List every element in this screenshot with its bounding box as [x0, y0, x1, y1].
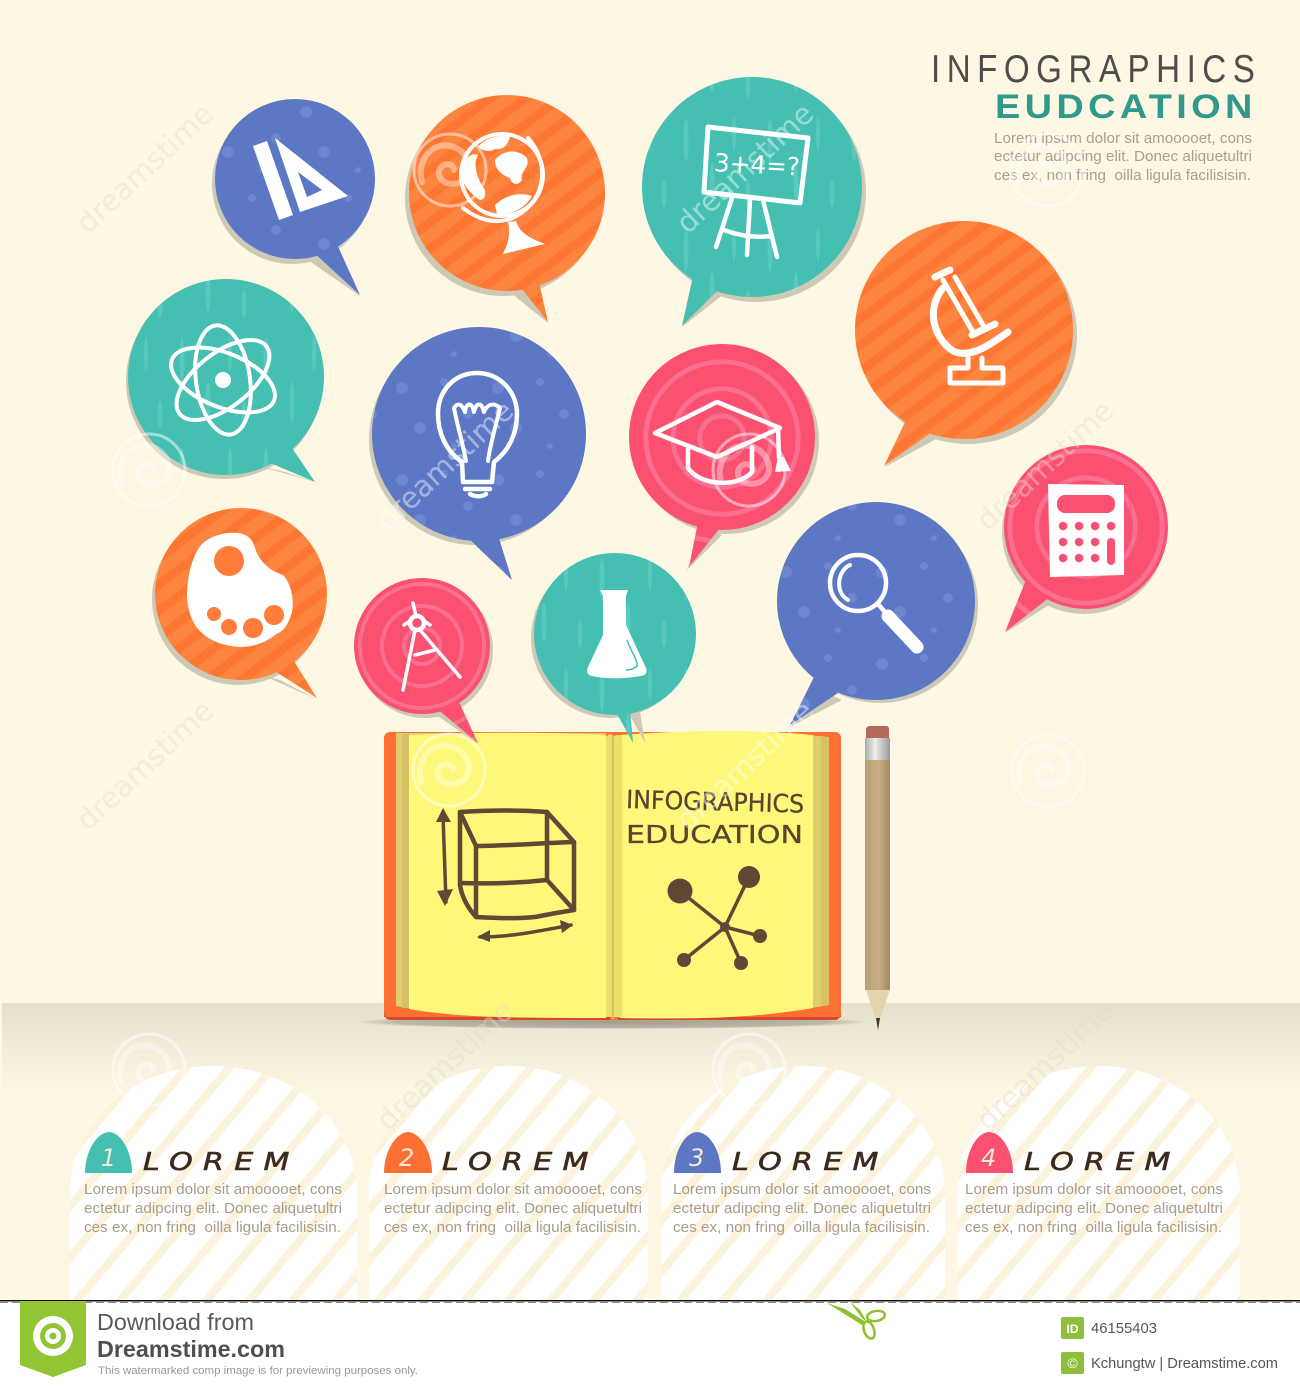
- text 4: [965, 1182, 1223, 1236]
- bubble: light bulb: [369, 327, 586, 580]
- text 2: ces ex, non fring oilla ligula facilisisin.: [384, 1220, 641, 1236]
- footer strip: [0, 1300, 1300, 1390]
- watermarks: [70, 96, 1120, 1137]
- text 2: [384, 1182, 642, 1236]
- title: infographics: INFOGRAPHICS: [931, 46, 1255, 91]
- watermarks: dreamstime: [370, 993, 520, 1137]
- icon: id: ID: [1066, 1322, 1079, 1336]
- intro text: ectetur adipcing elit. Donec aliquetultri: [994, 149, 1252, 165]
- bubble: set square: [212, 99, 375, 296]
- heading 3: LOREM: [732, 1146, 879, 1176]
- pencil: [865, 726, 890, 1030]
- drawing: molecule: [668, 866, 767, 970]
- watermarks: dreamstime: [970, 993, 1120, 1137]
- dreamstime brand: Dreamstime.com: [97, 1336, 285, 1362]
- credit: Kchungtw | Dreamstime.com: [1091, 1355, 1278, 1372]
- icon: scissors: [827, 1302, 886, 1340]
- bubble: blackboard: 3+4=?: [713, 148, 801, 182]
- intro text: ces ex, non fring oilla ligula facilisisin.: [994, 168, 1251, 184]
- drawing: cube with arrows: [436, 808, 574, 942]
- info card 2: [369, 1066, 648, 1300]
- info card 4: [957, 1066, 1240, 1300]
- bubble: magnifier: [777, 502, 978, 727]
- subtitle: eudcation: EUDCATION: [995, 87, 1252, 126]
- watermarks: dreamstime: [670, 693, 820, 837]
- text 3: ectetur adipcing elit. Donec aliquetultri: [673, 1201, 931, 1217]
- bubble: microscope: [855, 221, 1077, 467]
- open book: [384, 731, 841, 1020]
- badge 2: 2: [399, 1144, 414, 1172]
- right page: [619, 731, 829, 1018]
- title block: [931, 46, 1255, 184]
- badge 4: 4: [981, 1144, 996, 1172]
- watermarks: dreamstime: [70, 693, 220, 837]
- text 1: Lorem ipsum dolor sit amooooet, cons: [84, 1182, 342, 1198]
- download text: Download from: [97, 1309, 254, 1335]
- info card 3: [661, 1066, 945, 1300]
- bubble: blackboard: [642, 77, 866, 327]
- icon: dreamstime badge: [20, 1301, 86, 1377]
- info card 1: [70, 1066, 357, 1300]
- book shadow: [356, 1015, 868, 1029]
- book spine: [606, 734, 622, 1017]
- intro text: [994, 131, 1252, 184]
- badge 3: 3: [689, 1144, 704, 1172]
- heading 2: LOREM: [442, 1146, 589, 1176]
- heading 4: LOREM: [1024, 1146, 1171, 1176]
- image id: 46155403: [1091, 1320, 1157, 1337]
- book heading: INFOGRAPHICS: [626, 785, 805, 819]
- bubble: compass: [354, 578, 493, 744]
- bubble: globe: [405, 95, 605, 323]
- text 3: [673, 1182, 931, 1236]
- book heading: [626, 785, 805, 849]
- badge 4: [966, 1132, 1013, 1173]
- watermarks: dreamstime: [370, 393, 520, 537]
- text 1: ces ex, non fring oilla ligula facilisisin.: [84, 1220, 341, 1236]
- bubble: flask: [531, 553, 696, 743]
- ground band: [2, 1003, 1300, 1098]
- text 4: ces ex, non fring oilla ligula facilisisin.: [965, 1220, 1222, 1236]
- badge 3: [674, 1132, 721, 1173]
- book heading: EDUCATION: [626, 820, 803, 849]
- icon: id: [1061, 1317, 1084, 1339]
- text 1: ectetur adipcing elit. Donec aliquetultri: [84, 1201, 342, 1217]
- watermarks: dreamstime: [970, 393, 1120, 537]
- badge 1: 1: [101, 1144, 116, 1172]
- bubble: graduation cap: [629, 344, 819, 570]
- badge 2: [384, 1132, 432, 1173]
- bubble: atom: [126, 279, 324, 482]
- badge 1: [85, 1132, 132, 1173]
- text 2: ectetur adipcing elit. Donec aliquetultri: [384, 1201, 642, 1217]
- text 1: [84, 1182, 342, 1236]
- bubble: palette: [152, 508, 327, 699]
- bubble: calculator: [1002, 445, 1168, 633]
- heading 1: LOREM: [143, 1146, 290, 1176]
- text 2: Lorem ipsum dolor sit amooooet, cons: [384, 1182, 642, 1198]
- text 4: ectetur adipcing elit. Donec aliquetultri: [965, 1201, 1223, 1217]
- text 3: ces ex, non fring oilla ligula facilisisin.: [673, 1220, 930, 1236]
- left page: [396, 733, 606, 1018]
- intro text: Lorem ipsum dolor sit amooooet, cons: [994, 131, 1252, 147]
- icon: copyright: [1061, 1352, 1084, 1374]
- book cover: [384, 732, 841, 1020]
- icon: copyright: ©: [1067, 1355, 1078, 1371]
- footer note: This watermarked comp image is for previewing purposes only.: [98, 1365, 418, 1377]
- text 4: Lorem ipsum dolor sit amooooet, cons: [965, 1182, 1223, 1198]
- watermarks: dreamstime: [70, 96, 220, 240]
- text 3: Lorem ipsum dolor sit amooooet, cons: [673, 1182, 931, 1198]
- watermarks: dreamstime: [670, 96, 820, 240]
